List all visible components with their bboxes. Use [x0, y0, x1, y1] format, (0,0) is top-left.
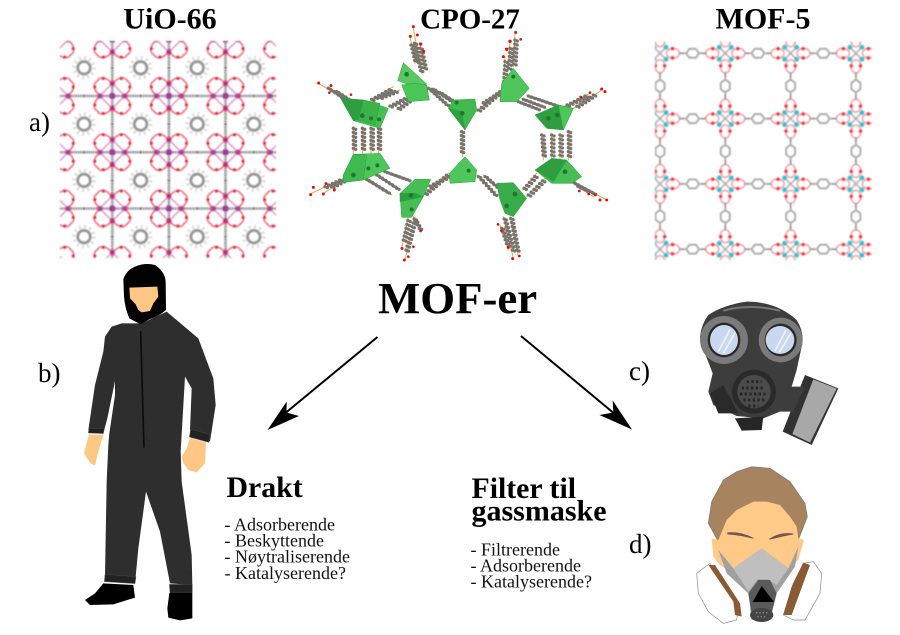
cartridges: [697, 563, 738, 623]
heading: Filter til gassmaske: Filter til: [472, 472, 576, 505]
list: filter properties: - Adsorberende: [470, 556, 581, 576]
list: suit properties: - Adsorberende: [224, 514, 335, 534]
eyebrows: [728, 533, 793, 539]
heading: Filter til gassmaske: [472, 472, 607, 528]
label c): c): [629, 356, 650, 386]
label b): b): [38, 358, 60, 388]
cuffs and ankle bands: [88, 428, 210, 593]
title: UiO-66: UiO-66: [123, 2, 217, 36]
list: suit properties: - Katalyserende?: [224, 563, 346, 583]
heading: Drakt: Drakt: [226, 471, 303, 504]
list: suit properties: - Beskyttende: [224, 530, 324, 550]
title: CPO-27: CPO-27: [420, 4, 520, 36]
crystal lattice: MOF-5: [655, 42, 872, 260]
icon: full gas mask: [700, 302, 838, 445]
list: suit properties: - Nøytraliserende: [224, 546, 350, 566]
hair: [708, 467, 807, 542]
breathing valve: [710, 385, 738, 413]
eyepieces: [700, 316, 748, 364]
list: filter properties: - Filtrerende: [470, 540, 560, 560]
boots: [85, 583, 135, 605]
arrow: to gas mask filter: [521, 336, 632, 430]
face: [129, 287, 158, 312]
arrow: to suit: [268, 337, 378, 430]
crystal lattice: UiO-66: [60, 41, 276, 258]
heading: MOF-er: MOF-er: [378, 273, 537, 323]
hood: [123, 264, 166, 324]
list: filter properties: [470, 540, 592, 592]
face: [712, 502, 804, 575]
valve: [748, 580, 777, 613]
mask shell: [718, 547, 798, 620]
canister: [783, 375, 838, 445]
label a): a): [29, 107, 50, 137]
icon: protective suit figure: [84, 264, 216, 620]
crystal structure: CPO-27: [309, 25, 608, 261]
label d): d): [629, 529, 652, 559]
list: suit properties: [224, 514, 350, 583]
list: filter properties: - Katalyserende?: [470, 572, 592, 592]
zipper: [141, 331, 144, 448]
chin: [735, 417, 763, 431]
icon: half mask respirator on face: [697, 467, 822, 623]
mask head: [700, 302, 805, 418]
suit body: [88, 312, 216, 585]
hands: [84, 434, 103, 466]
title: MOF-5: MOF-5: [716, 2, 810, 36]
heading: Filter til gassmaske: gassmaske: [472, 494, 607, 528]
